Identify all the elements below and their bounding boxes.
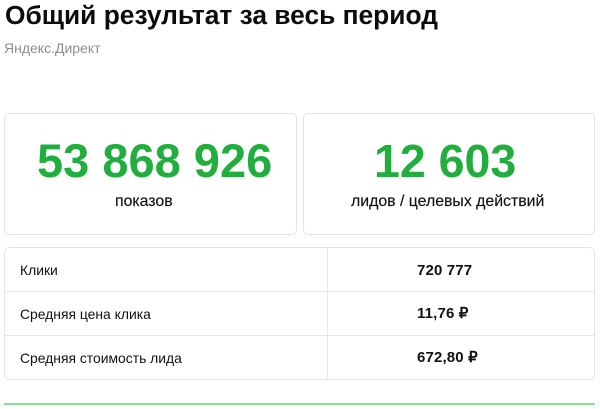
row value: average click price: 11,76 ₽ [417, 305, 468, 322]
impressions number: 53 868 926 [37, 134, 272, 187]
subtitle: Яндекс.Директ [4, 40, 101, 56]
impressions label: показов [115, 193, 173, 210]
row value: clicks: 720 777 [417, 262, 472, 279]
row label: average lead cost: Средняя стоимость лида [20, 350, 182, 366]
leads number: 12 603 [374, 135, 516, 187]
green bottom line [4, 403, 595, 405]
row value: average lead cost: 672,80 ₽ [417, 349, 478, 366]
title: Общий результат за весь период [5, 0, 438, 30]
panel: metrics table [4, 247, 595, 380]
row label: average click price: Средняя цена клика [20, 306, 151, 322]
row label: clicks: Клики [20, 262, 58, 278]
leads label: лидов / целевых действий [351, 193, 544, 210]
panel: impressions [4, 113, 297, 235]
panel: leads [303, 113, 595, 235]
